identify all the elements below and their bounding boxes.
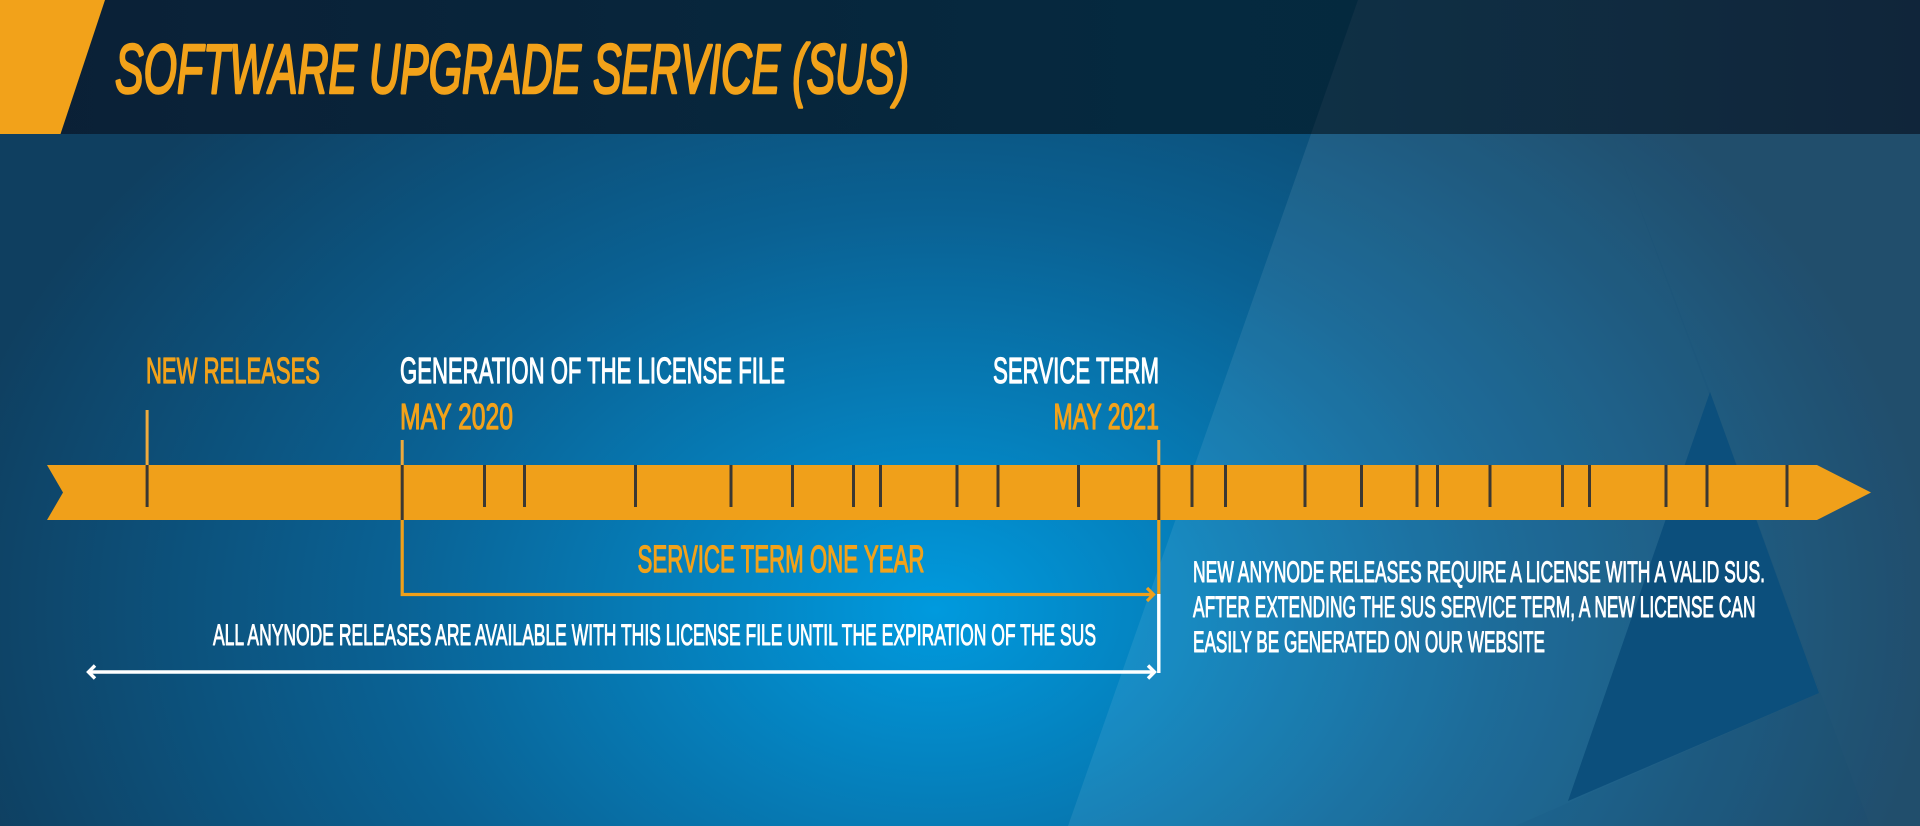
text block: license note: EASILY BE GENERATED ON OUR WEBSITE — [1193, 626, 1545, 659]
label: service term one year: SERVICE TERM ONE YEAR — [638, 539, 924, 581]
white double arrow — [88, 594, 1159, 678]
orange marker lines above the bar — [146, 410, 1160, 465]
label: may 2020: MAY 2020 — [400, 396, 513, 437]
header bar — [0, 0, 1920, 134]
label: service term: SERVICE TERM — [993, 350, 1159, 391]
label: may 2021: MAY 2021 — [1054, 396, 1159, 437]
label: generation of the license file: GENERATION OF THE LICENSE FILE — [400, 350, 785, 391]
dark triangle logo shape — [1568, 392, 1819, 801]
orange bracket arrow: service term one year — [402, 520, 1159, 601]
faint background triangle — [1515, 134, 1870, 826]
label: new releases: NEW RELEASES — [146, 350, 320, 391]
label: all anynode releases: ALL ANYNODE RELEASES ARE AVAILABLE WITH THIS LICENSE FILE UNTIL THE EXPIRATION OF THE SUS — [213, 619, 1096, 652]
orange header corner — [0, 0, 105, 134]
large light diagonal overlay — [1068, 134, 1920, 826]
title: SOFTWARE UPGRADE SERVICE (SUS) — [115, 30, 909, 108]
text block: license note — [1193, 556, 1765, 659]
header lighter diagonal — [1311, 0, 1920, 134]
timeline arrow bar — [47, 465, 1871, 520]
release tick marks — [146, 465, 1789, 520]
